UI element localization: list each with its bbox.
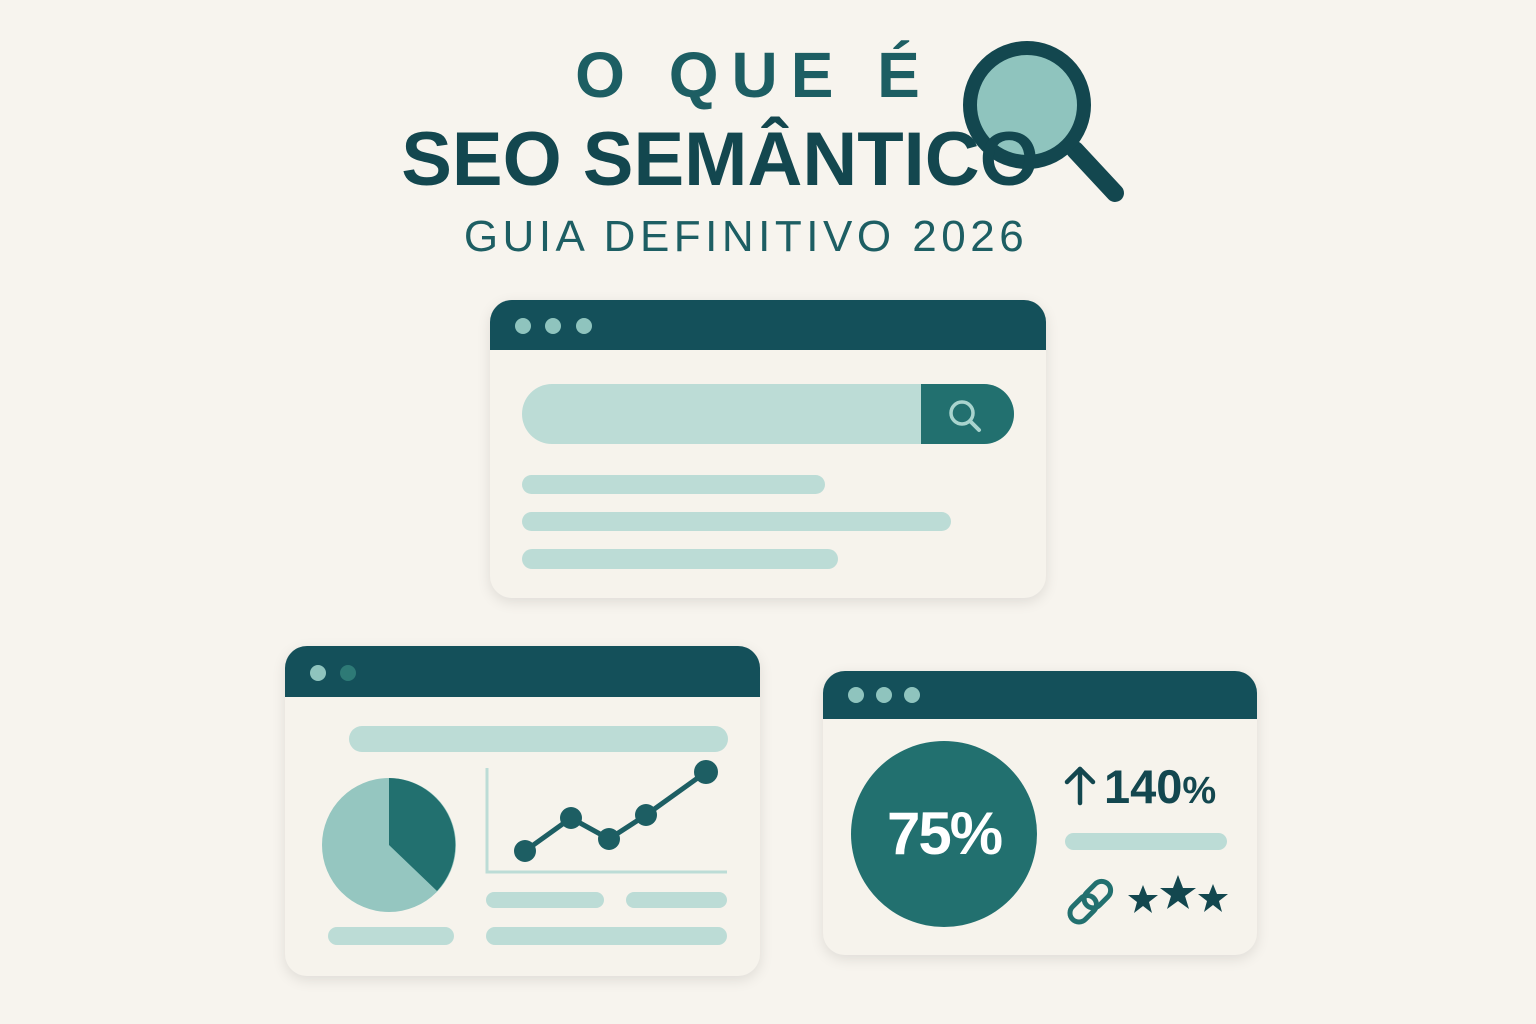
panel: search browser (490, 300, 1046, 598)
panel: stats browser (823, 671, 1257, 955)
stat circle 75%: 75% (887, 800, 1001, 867)
panel: analytics browser (285, 646, 760, 976)
subtitle: GUIA DEFINITIVO 2026 (464, 212, 1028, 261)
stat circle 75% (851, 741, 1037, 927)
title: SEO SEMÂNTICO: SEO SEMÂNTICO (401, 117, 1039, 202)
chart: pie and line (322, 760, 727, 912)
search bar (522, 384, 1014, 444)
stat 140%: 140% (1104, 760, 1216, 813)
icon: up arrow (1064, 766, 1096, 806)
title: O QUE É: O QUE É (575, 39, 933, 111)
icon: magnifier (963, 41, 1124, 202)
icons: link and stars (1068, 875, 1228, 924)
